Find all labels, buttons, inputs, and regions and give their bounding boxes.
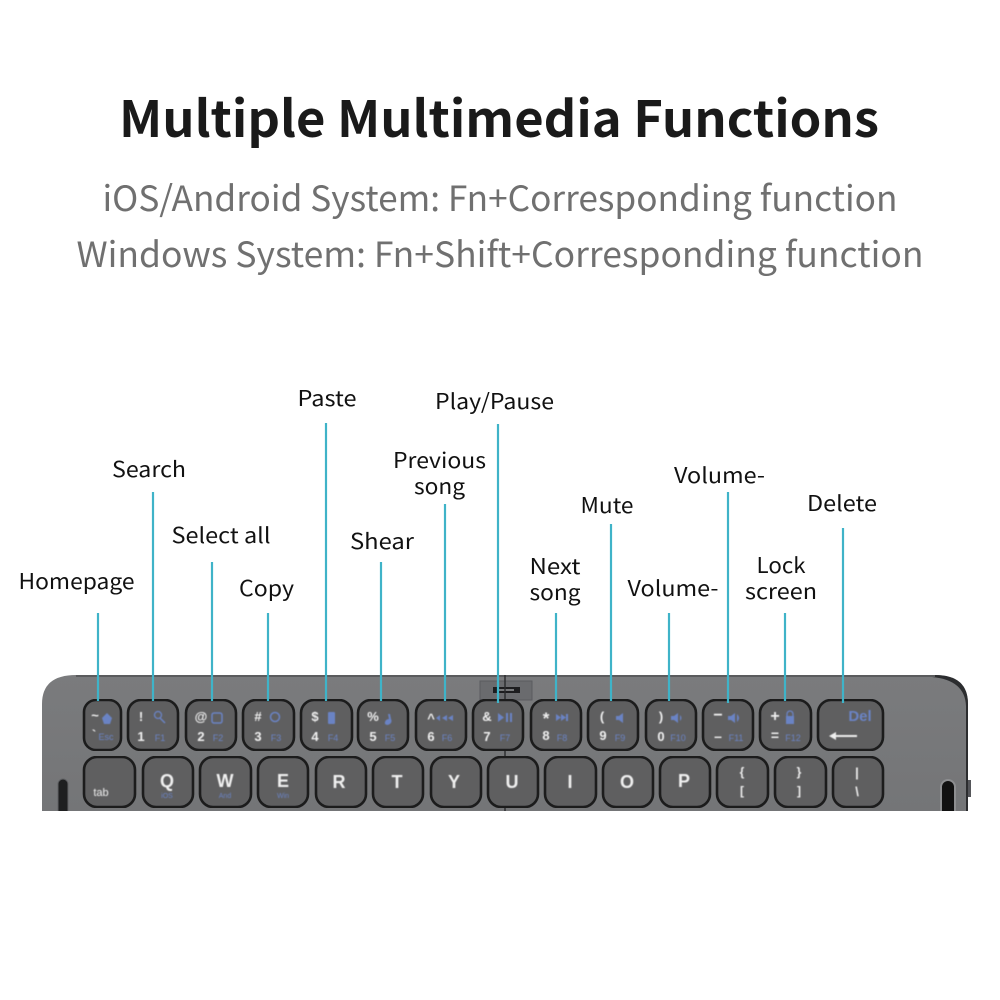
- label: Homepage: Homepage: [18, 565, 134, 596]
- key legends: blue function labels: F2: [213, 733, 223, 743]
- key legends: white: W: [216, 771, 234, 791]
- key legends: white: ~: [91, 708, 99, 723]
- label: Play/Pause: Play/Pause: [435, 385, 554, 416]
- key legends: white: [: [740, 784, 744, 798]
- number row keys: [84, 700, 883, 750]
- subtitle: Windows shortcut: Windows System: Fn+Shift+Corresponding function: [76, 227, 924, 278]
- label: Previous song: song: [414, 470, 465, 501]
- key legends: white: #: [254, 709, 262, 724]
- subtitle: iOS/Android shortcut: iOS/Android System: Fn+Corresponding function: [102, 171, 897, 222]
- key legends: white: 8: [542, 728, 550, 743]
- label: Select all: Select all: [172, 519, 270, 550]
- keyboard: [0, 675, 1000, 831]
- label: Delete: Delete: [807, 487, 877, 518]
- key legends: blue function labels: And: [219, 793, 231, 800]
- key legends: white: P: [678, 771, 690, 791]
- label: Copy: Copy: [239, 572, 294, 603]
- callout lines: [98, 423, 843, 703]
- key legends: blue function labels: F4: [328, 733, 338, 743]
- key legends: white: E: [277, 771, 289, 791]
- key legends: white: I: [567, 772, 573, 792]
- key legends: blue function labels: F9: [615, 733, 625, 743]
- key legends: blue function labels: F5: [385, 733, 395, 743]
- hinge: [480, 675, 532, 811]
- key legends: blue function labels: Win: [277, 793, 289, 800]
- key legends: blue function labels: [98, 708, 872, 800]
- key legends: white: %: [367, 709, 379, 724]
- key legends: white: =: [771, 727, 779, 743]
- label: Lock screen: screen: [745, 575, 817, 606]
- key legends: white: 5: [369, 729, 377, 744]
- key legends: blue function labels: F11: [729, 733, 743, 743]
- key legends: blue function labels: F7: [500, 733, 510, 743]
- label: Search: Search: [112, 453, 186, 484]
- key legends: white: ^: [427, 711, 435, 726]
- key legends: white: |: [855, 765, 859, 780]
- label: Next song: [530, 550, 580, 607]
- key legends: white: ): [659, 709, 663, 724]
- label: Volume- (left): Volume-: [628, 572, 718, 603]
- key legends: white: 0: [657, 729, 665, 744]
- label: Paste: Paste: [298, 382, 356, 413]
- label: Mute: Mute: [580, 489, 634, 520]
- key legends: blue function labels: F10: [670, 733, 686, 743]
- key legends: white: tab: [93, 787, 109, 799]
- key legends: blue function labels: Del: [848, 708, 872, 725]
- key legends: blue function labels: Esc: [98, 732, 114, 742]
- key legends: white: O: [620, 772, 634, 792]
- key legends: white: Y: [448, 772, 460, 792]
- key legends: blue function labels: F12: [785, 733, 801, 743]
- key legends: white: T: [392, 772, 402, 792]
- key legends: white: 6: [427, 729, 435, 744]
- label: Lock screen: Lock: [756, 549, 806, 580]
- key legends: white: \: [855, 784, 859, 799]
- key legends: blue function labels: F8: [557, 733, 567, 743]
- key legends: blue function labels: iOS: [161, 793, 173, 800]
- key legends: white: }: [797, 765, 802, 779]
- key legends: white: 2: [197, 729, 205, 744]
- label: Volume- (right): Volume-: [674, 459, 765, 490]
- side slots: [58, 779, 955, 820]
- label: Previous song: [393, 444, 486, 501]
- media icons: [102, 711, 794, 725]
- key legends: white: !: [139, 709, 143, 724]
- label: Previous song: Previous: [393, 444, 486, 475]
- key legends: white: &: [482, 709, 492, 724]
- key legends: white: −: [713, 707, 723, 724]
- key legends: white: 7: [483, 729, 491, 744]
- key legends: white: 9: [599, 728, 607, 743]
- key legends: white: +: [770, 708, 780, 725]
- key legends: white: 3: [254, 729, 262, 744]
- letter row keys: [84, 757, 883, 807]
- key legends: white: (: [600, 709, 605, 724]
- key legends: white: ]: [797, 784, 801, 798]
- key legends: white: @: [195, 709, 207, 724]
- keyboard body: [42, 675, 968, 811]
- label: Lock screen: [745, 549, 817, 606]
- key legends: white: `: [92, 727, 96, 742]
- key legends: white: Q: [160, 771, 174, 791]
- key legends: blue function labels: F6: [442, 733, 452, 743]
- key legends: blue function labels: F1: [155, 733, 165, 743]
- key legends: white: [91, 707, 859, 799]
- key legends: white: U: [506, 772, 518, 792]
- label: Shear: Shear: [350, 525, 415, 556]
- key legends: white: 1: [137, 729, 145, 744]
- key legends: white: –: [714, 728, 722, 744]
- key legends: blue function labels: F3: [271, 733, 281, 743]
- key legends: white: R: [332, 772, 346, 792]
- key legends: white: $: [311, 709, 319, 724]
- label: Next song: song: [530, 576, 580, 607]
- key legends: white: {: [740, 765, 745, 779]
- label: Next song: Next: [530, 550, 580, 581]
- title: Multiple Multimedia Functions: [119, 80, 879, 152]
- key legends: white: *: [543, 709, 550, 728]
- key legends: white: 4: [311, 729, 319, 744]
